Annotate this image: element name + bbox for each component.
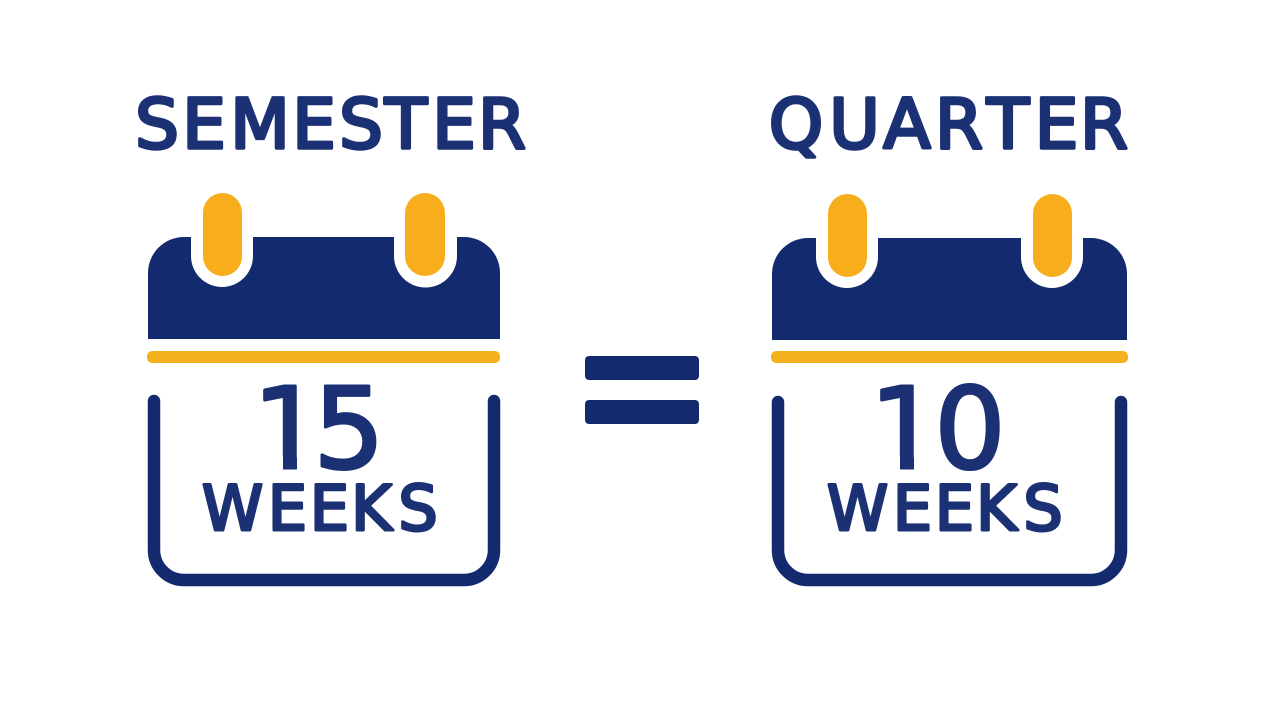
heading: semester: SEMESTER bbox=[135, 85, 526, 165]
label: weeks: WEEKS bbox=[202, 472, 438, 545]
icon: semester calendar bbox=[147, 193, 500, 580]
icon: quarter calendar bbox=[771, 194, 1128, 580]
icon: equals sign bbox=[585, 356, 699, 424]
heading: quarter: QUARTER bbox=[769, 85, 1128, 165]
label: weeks: WEEKS bbox=[827, 472, 1063, 545]
number: 10: 10 bbox=[869, 365, 1006, 495]
number: 15: 15 bbox=[252, 365, 385, 495]
